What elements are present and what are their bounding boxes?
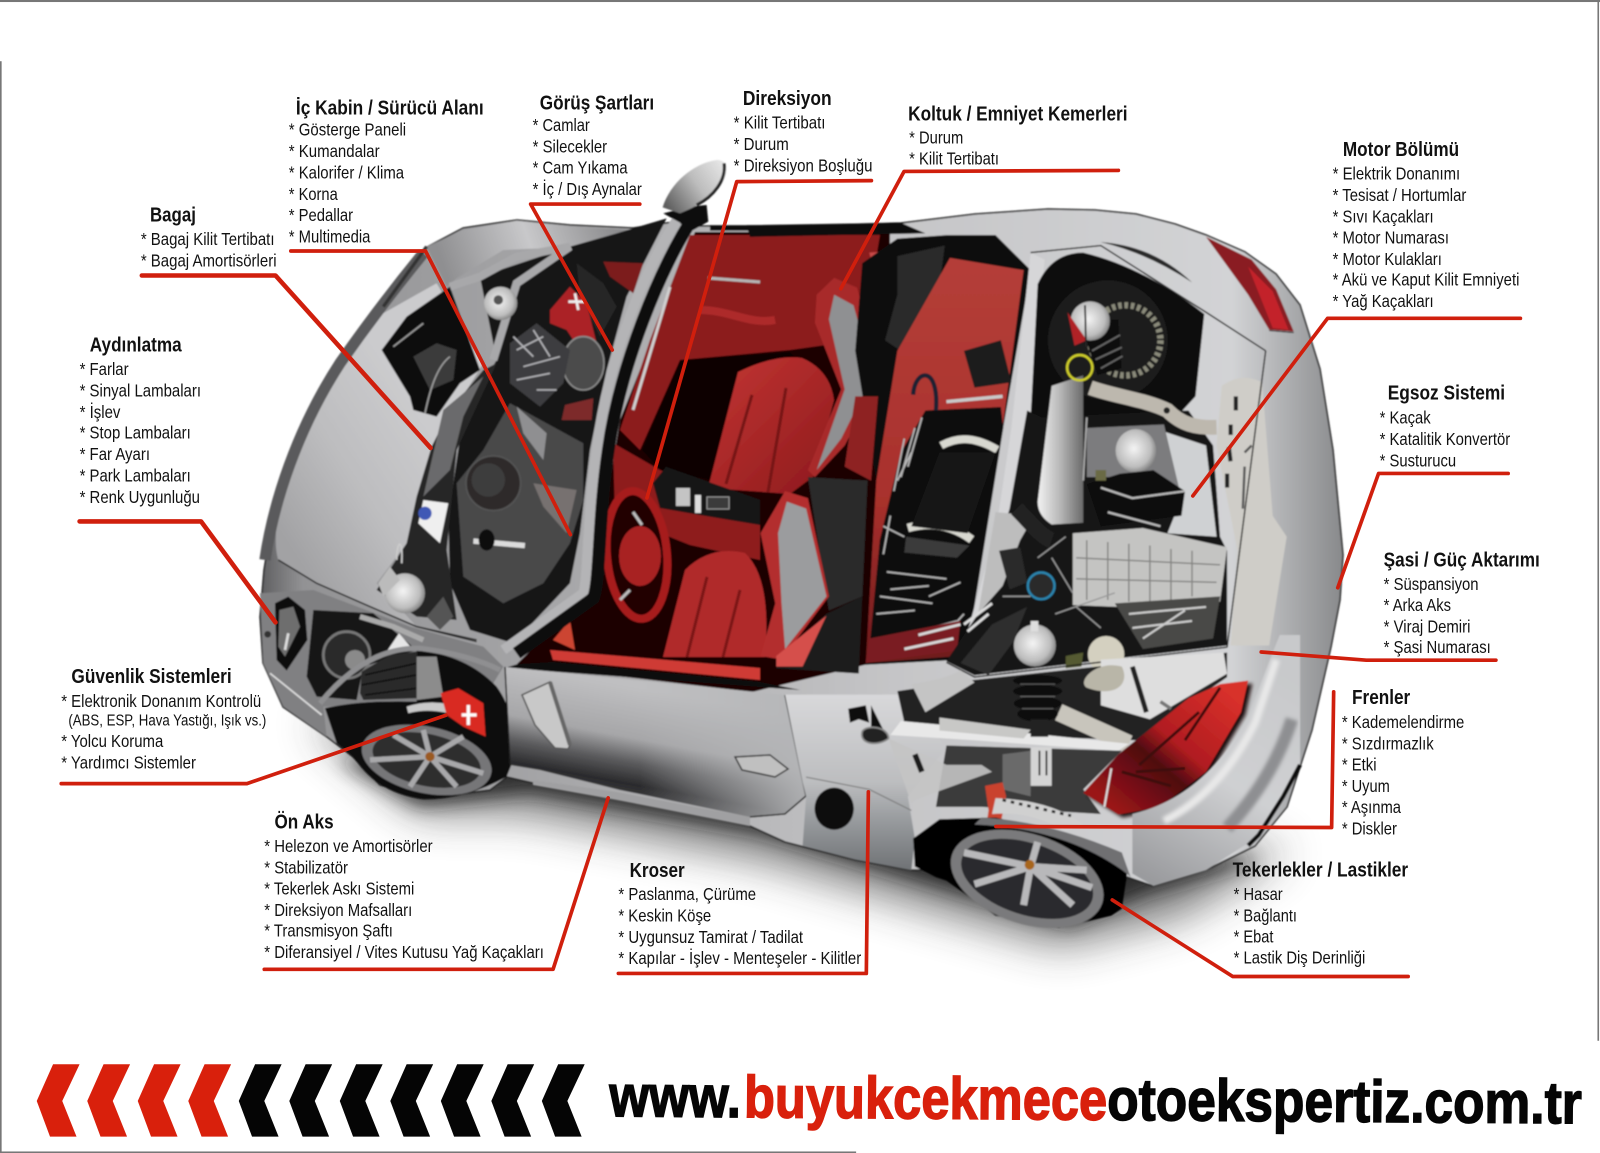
red trim at top bbox=[869, 251, 894, 267]
lower engine bbox=[1115, 596, 1220, 649]
top tail light bbox=[1206, 237, 1294, 332]
spring bbox=[1013, 675, 1062, 686]
label: Frenler: * Aşınma bbox=[1342, 797, 1401, 817]
label: Ön Aks bbox=[264, 811, 544, 962]
headlight bbox=[275, 597, 307, 671]
label: Kroser: * Keskin Köşe bbox=[618, 905, 711, 925]
black bulkhead bbox=[855, 235, 1031, 665]
label: Frenler: Frenler bbox=[1352, 687, 1410, 709]
label: Güvenlik Sistemleri: * Yolcu Koruma bbox=[61, 731, 163, 751]
door seam bbox=[505, 667, 806, 817]
label: Frenler: * Uyum bbox=[1342, 776, 1390, 796]
luggage bay dark bbox=[448, 218, 667, 643]
hood top strip bbox=[427, 221, 633, 287]
label: Görüş Şartları: * İç / Dış Aynalar bbox=[533, 179, 642, 199]
label: Güvenlik Sistemleri: * Elektronik Donanım Kontrolü bbox=[61, 691, 261, 711]
label: Bagaj bbox=[141, 204, 277, 270]
rear wheel well bbox=[913, 817, 1127, 928]
label: Egsoz Sistemi: * Kaçak bbox=[1380, 407, 1431, 427]
leader lines bbox=[61, 170, 1520, 976]
black top rail bbox=[746, 223, 925, 237]
door bbox=[505, 667, 806, 826]
label: Motor Bölümü bbox=[1333, 139, 1519, 311]
sill highlight bbox=[533, 780, 750, 826]
label: Direksiyon: Direksiyon bbox=[743, 88, 832, 110]
label: Motor Bölümü: * Akü ve Kaput Kilit Emniyeti bbox=[1333, 270, 1519, 290]
footer chevrons bbox=[37, 1064, 585, 1137]
label: Direksiyon bbox=[734, 88, 872, 175]
label: Motor Bölümü: * Tesisat / Hortumlar bbox=[1333, 185, 1466, 205]
label: Motor Bölümü: * Sıvı Kaçakları bbox=[1333, 206, 1434, 226]
ground shadow bbox=[310, 720, 1290, 945]
strut domes bbox=[1014, 624, 1056, 667]
label: Güvenlik Sistemleri: (ABS, ESP, Hava Yastığı, Işık vs.) bbox=[68, 712, 266, 729]
label: Koltuk: * Durum bbox=[909, 127, 963, 147]
brake disc band bbox=[992, 798, 1083, 831]
leader: Egsoz bbox=[1338, 473, 1508, 588]
label: Aydınlatma: * Farlar bbox=[80, 359, 129, 379]
label: Kroser: * Kapılar - İşlev - Menteşeler - Kilitler bbox=[618, 948, 861, 968]
label: İç Kabin: * Korna bbox=[289, 184, 338, 204]
dark hoses bbox=[1017, 509, 1052, 540]
label: Motor Bölümü: * Motor Kulakları bbox=[1333, 249, 1442, 269]
label: Motor Bölümü: * Yağ Kaçakları bbox=[1333, 291, 1434, 311]
rear section: seats, bulkhead and engine bbox=[746, 223, 1294, 677]
leader: Motor bbox=[1193, 318, 1520, 496]
label: Şasi / Güç Aktarımı: * Süspansiyon bbox=[1384, 574, 1479, 594]
bay seam lines bbox=[946, 351, 1266, 677]
label: Frenler: * Kademelendirme bbox=[1342, 712, 1464, 732]
label: Şasi / Güç Aktarımı: Şasi / Güç Aktarımı bbox=[1384, 549, 1540, 571]
label: Görüş Şartları bbox=[533, 93, 654, 199]
label: Koltuk bbox=[908, 103, 1128, 168]
label: Güvenlik Sistemleri: Güvenlik Sistemleri bbox=[71, 666, 232, 688]
tyre tread bbox=[360, 652, 417, 700]
front wheel arch bbox=[325, 650, 514, 799]
label: Aydınlatma: * Sinyal Lambaları bbox=[80, 380, 201, 400]
lower seat back bbox=[808, 477, 868, 610]
suspension bbox=[417, 657, 443, 700]
website address: buyukcekmece bbox=[744, 1063, 1108, 1133]
label: Güvenlik Sistemleri: * Yardımcı Sistemler bbox=[61, 752, 196, 772]
red caliper bbox=[983, 782, 1006, 849]
label: Koltuk: Koltuk / Emniyet Kemerleri bbox=[908, 103, 1128, 125]
label: Direksiyon: * Direksiyon Boşluğu bbox=[734, 155, 872, 175]
label: Egsoz Sistemi bbox=[1380, 382, 1510, 470]
label: Direksiyon: * Durum bbox=[734, 134, 789, 154]
label: Şasi / Güç Aktarımı: * Arka Aks bbox=[1384, 595, 1451, 615]
cabin interior bbox=[505, 232, 890, 692]
label: Direksiyon: * Kilit Tertibatı bbox=[734, 113, 826, 133]
label: Şasi / Güç Aktarımı: * Viraj Demiri bbox=[1384, 617, 1470, 637]
label: Frenler: * Diskler bbox=[1342, 819, 1397, 839]
tyre and brake cluster bbox=[577, 263, 617, 337]
label: Egsoz Sistemi: Egsoz Sistemi bbox=[1388, 382, 1505, 404]
lower seat cushion bbox=[663, 551, 766, 657]
engine bay background bbox=[946, 410, 1227, 675]
label: Aydınlatma bbox=[80, 335, 201, 507]
label: Aydınlatma: * Stop Lambaları bbox=[80, 423, 191, 443]
label: İç Kabin: * Multimedia bbox=[289, 226, 370, 246]
label: Şasi / Güç Aktarımı bbox=[1384, 549, 1540, 657]
website address bbox=[608, 1062, 1582, 1136]
A-pillar black rail bbox=[517, 215, 903, 653]
large grey bay body bbox=[457, 403, 583, 603]
red vents bbox=[562, 398, 593, 420]
brake disc bbox=[407, 702, 448, 713]
label: Aydınlatma: Aydınlatma bbox=[90, 335, 182, 357]
leader: Aydınlatma bbox=[80, 521, 276, 622]
label: İç Kabin: * Kalorifer / Klima bbox=[289, 163, 404, 183]
leader: Frenler bbox=[996, 692, 1334, 828]
bellows and strut disc bbox=[1080, 319, 1122, 375]
tail light bbox=[1087, 683, 1252, 817]
label: Frenler: * Sızdırmazlık bbox=[1342, 733, 1434, 753]
label: Görüş Şartları: * Camlar bbox=[533, 115, 590, 135]
label: Kroser: * Paslanma, Çürüme bbox=[618, 884, 756, 904]
label: İç Kabin: * Kumandalar bbox=[289, 141, 380, 161]
intake pipe bbox=[1038, 375, 1083, 524]
label: Aydınlatma: * İşlev bbox=[80, 402, 120, 422]
label: Görüş Şartları: * Silecekler bbox=[533, 137, 607, 157]
label: Tekerlekler / Lastikler: * Hasar bbox=[1234, 884, 1283, 904]
website address: www. bbox=[608, 1062, 741, 1130]
silver frame strip bbox=[946, 253, 1045, 663]
dark red seat side bbox=[845, 396, 878, 481]
label: Güvenlik Sistemleri bbox=[61, 666, 266, 772]
quarter panel bbox=[785, 695, 946, 870]
transmission bbox=[1073, 528, 1227, 609]
front strut and parts bbox=[385, 573, 425, 613]
strut top disc bbox=[484, 287, 517, 320]
fuel cap recess bbox=[815, 788, 854, 830]
silver arc between panels bbox=[450, 247, 570, 360]
leader: Güvenlik bbox=[61, 715, 446, 784]
label: İç Kabin: * Pedallar bbox=[289, 205, 353, 225]
label: Tekerlekler / Lastikler: Tekerlekler / Lastikler bbox=[1233, 859, 1408, 881]
label: İç Kabin bbox=[289, 96, 484, 246]
label: Bagaj: * Bagaj Kilit Tertibatı bbox=[141, 229, 274, 249]
exhaust pipe bbox=[1090, 388, 1217, 427]
label: Motor Bölümü: Motor Bölümü bbox=[1343, 139, 1459, 161]
label: Tekerlekler / Lastikler: * Bağlantı bbox=[1234, 905, 1297, 925]
intake and hoses bbox=[869, 407, 1003, 651]
label: Ön Aks: * Helezon ve Amortisörler bbox=[264, 836, 433, 856]
label: Aydınlatma: * Park Lambaları bbox=[80, 466, 191, 486]
bolt and bar bbox=[473, 538, 525, 548]
car body bbox=[260, 209, 1343, 926]
leader: Koltuk bbox=[841, 170, 1118, 289]
label: Frenler bbox=[1342, 687, 1464, 839]
door handle bbox=[735, 755, 788, 777]
label: Aydınlatma: * Renk Uygunluğu bbox=[80, 487, 200, 507]
upper mechanical bbox=[897, 653, 1227, 740]
label: İç Kabin: * Gösterge Paneli bbox=[289, 120, 406, 140]
dash and console bbox=[613, 443, 760, 560]
steering wheel bbox=[602, 489, 672, 621]
leader: İç Kabin bbox=[291, 251, 570, 535]
lower mechanical bbox=[936, 746, 1122, 814]
label: Tekerlekler / Lastikler bbox=[1233, 859, 1408, 968]
washer bottle bbox=[418, 500, 448, 543]
exhaust tube bbox=[1059, 712, 1129, 744]
label: Motor Bölümü: * Motor Numarası bbox=[1333, 227, 1449, 247]
label: Ön Aks: * Direksiyon Mafsalları bbox=[264, 900, 412, 920]
hood panel bbox=[276, 283, 483, 627]
leader: Görüş Şartları bbox=[531, 204, 640, 350]
blue ring bbox=[1028, 573, 1054, 599]
label: Kroser: * Uygunsuz Tamirat / Tadilat bbox=[618, 927, 803, 947]
upper seat back bbox=[808, 278, 882, 477]
red bulkhead panel bbox=[866, 258, 1024, 663]
A-pillar silver bbox=[503, 215, 680, 650]
label: Bagaj: * Bagaj Amortisörleri bbox=[141, 250, 277, 270]
rear wheel rim bbox=[938, 812, 1116, 946]
label: Ön Aks: Ön Aks bbox=[274, 811, 334, 834]
label: Egsoz Sistemi: * Katalitik Konvertör bbox=[1380, 429, 1510, 449]
leader: Bagaj bbox=[142, 275, 431, 448]
label: Kroser bbox=[618, 860, 861, 968]
label: Koltuk: * Kilit Tertibatı bbox=[909, 148, 999, 168]
upper black cutaway bbox=[382, 287, 480, 417]
label: Şasi / Güç Aktarımı: * Şasi Numarası bbox=[1384, 637, 1491, 657]
door mirror bbox=[663, 160, 726, 230]
leader: Kroser bbox=[618, 792, 868, 973]
label: Kroser: Kroser bbox=[630, 860, 685, 882]
cut marks bbox=[848, 705, 883, 730]
brake caliper bbox=[441, 688, 486, 737]
black box on panel bbox=[964, 340, 1011, 388]
label: Frenler: * Etki bbox=[1342, 754, 1377, 774]
label: Ön Aks: * Stabilizatör bbox=[264, 857, 348, 877]
label: İç Kabin: İç Kabin / Sürücü Alanı bbox=[296, 96, 484, 119]
front section: hood and luggage bay bbox=[265, 160, 726, 650]
label: Egsoz Sistemi: * Susturucu bbox=[1380, 450, 1456, 470]
rear wheel well bbox=[1031, 253, 1204, 442]
engine mount bbox=[1116, 429, 1156, 473]
leader: Şasi bbox=[1261, 652, 1496, 660]
label: Ön Aks: * Diferansiyel / Vites Kutusu Yağ Kaçakları bbox=[264, 942, 544, 962]
label: Aydınlatma: * Far Ayarı bbox=[80, 444, 150, 464]
label: Bagaj: Bagaj bbox=[150, 204, 196, 226]
car illustration bbox=[260, 160, 1343, 946]
rear bumper shading bbox=[1132, 635, 1300, 886]
label: Görüş Şartları: * Cam Yıkama bbox=[533, 157, 628, 177]
exhaust muffler bbox=[1217, 378, 1287, 645]
front corner: headlight, wheel and arch bbox=[260, 560, 514, 806]
mechanical cutaway bbox=[307, 610, 417, 700]
cabin floor bbox=[642, 352, 830, 480]
leader: Tekerlekler bbox=[1112, 900, 1408, 976]
red sill bbox=[550, 650, 760, 680]
wheel rim bbox=[355, 714, 498, 806]
label: Ön Aks: * Tekerlek Askı Sistemi bbox=[264, 878, 414, 898]
door panel bbox=[620, 235, 880, 450]
upper seat cushion bbox=[708, 357, 834, 494]
door scoop bbox=[522, 682, 570, 749]
leader: Ön Aks bbox=[264, 798, 608, 969]
label: Motor Bölümü: * Elektrik Donanımı bbox=[1333, 164, 1460, 184]
label: Ön Aks: * Transmisyon Şaftı bbox=[264, 921, 393, 941]
rear quarter and lower rear corner bbox=[785, 635, 1300, 946]
hood outer dark rim bbox=[265, 253, 423, 560]
label: Tekerlekler / Lastikler: * Lastik Diş Derinliği bbox=[1234, 948, 1365, 968]
yellow ring bbox=[1067, 355, 1092, 380]
bumper shading bbox=[260, 590, 503, 737]
label: Tekerlekler / Lastikler: * Ebat bbox=[1234, 926, 1274, 946]
leader: Direksiyon bbox=[647, 181, 871, 498]
label: Görüş Şartları: Görüş Şartları bbox=[540, 93, 654, 115]
